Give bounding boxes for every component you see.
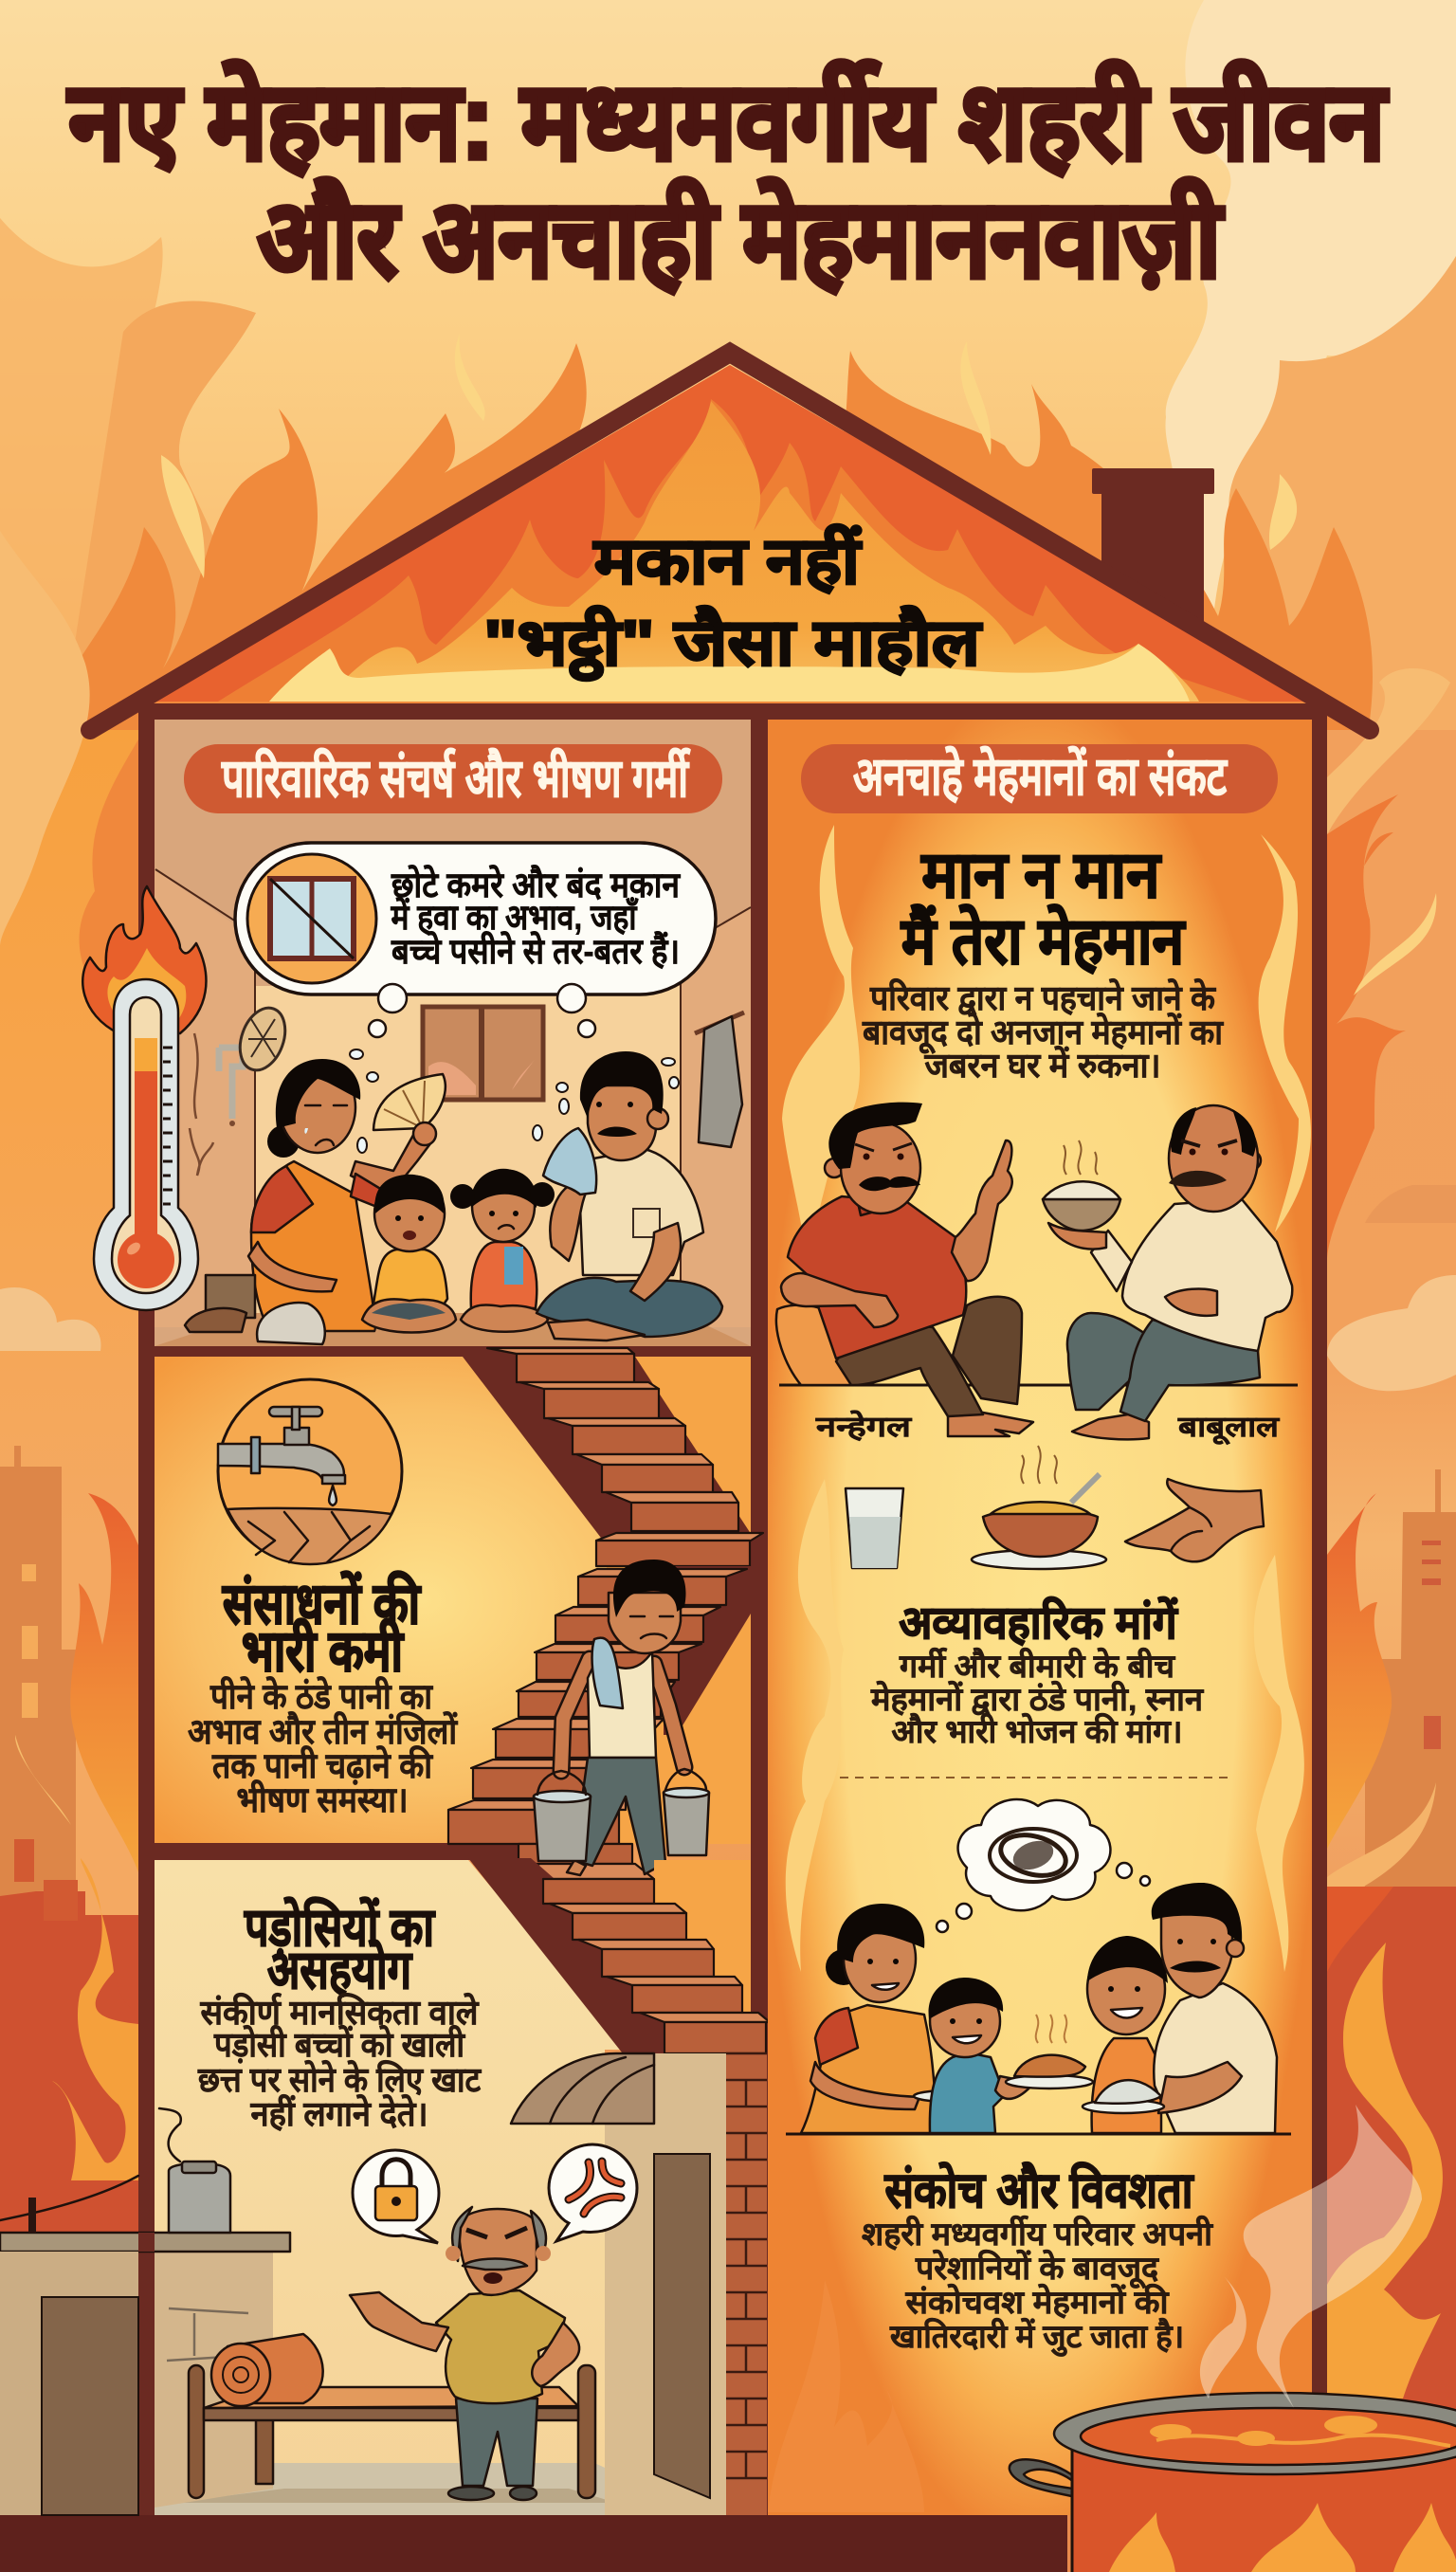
impractical demands text — [870, 1647, 1204, 1750]
title — [67, 60, 1389, 299]
water text: पीने के ठंडे पानी का — [209, 1676, 433, 1716]
neighbours text: संकीर्ण मानसिकता वाले — [200, 1993, 480, 2032]
divider beam — [155, 1346, 751, 1357]
panel: unwanted guests — [768, 720, 1312, 2515]
impractical demands text: गर्मी और बीमारी के बीच — [899, 1647, 1175, 1685]
compulsion text: परेशानियों के बावजूद — [915, 2249, 1159, 2289]
father — [537, 1051, 722, 1341]
neighbours text: छत्त पर सोने के लिए खाट — [197, 2060, 482, 2099]
guests text — [862, 978, 1225, 1085]
roof heading: "भट्ठी" जैसा माहौल — [483, 606, 983, 681]
neighbours heading — [244, 1896, 436, 1999]
impractical demands text: और भारी भोजन की मांग। — [891, 1712, 1183, 1750]
cot and rolled bedding — [189, 2334, 595, 2498]
side flames inside panel — [782, 825, 1311, 1261]
icons: water, food, pointing hand — [846, 1446, 1264, 1569]
plates of food — [1006, 2075, 1093, 2089]
floor line — [779, 1384, 1298, 1386]
name label: बाबूलाल — [1177, 1412, 1281, 1445]
water tank and terrace wall — [0, 2108, 290, 2515]
side flame layers — [0, 730, 138, 1545]
guests heading: मैं तेरा मेहमान — [900, 904, 1186, 977]
stair steps down to terrace — [543, 1879, 770, 2053]
speech bubble: no ventilation — [235, 843, 716, 1037]
room walls — [155, 869, 255, 1327]
hand fan — [373, 1074, 446, 1130]
guests text: जबरन घर में रुकना। — [924, 1046, 1160, 1085]
room window — [423, 1007, 543, 1100]
steam — [1200, 2105, 1422, 2408]
mother serving — [801, 2005, 938, 2133]
neighbours text: नहीं लगाने देते। — [250, 2094, 428, 2133]
panel: family and heat — [82, 720, 751, 1346]
water heading: भारी कमी — [242, 1618, 405, 1683]
hanging towel — [695, 1012, 744, 1147]
thermometer and flame — [82, 886, 206, 1310]
man carrying buckets — [534, 1560, 709, 1875]
name label: नन्हेगल — [815, 1410, 913, 1443]
neighbours heading: असहयोग — [267, 1939, 413, 1999]
angry neighbour — [350, 2207, 579, 2500]
city buildings — [0, 1446, 76, 1896]
compulsion text: संकोचवश मेहमानों की — [904, 2283, 1170, 2321]
impractical demands heading: अव्यावहारिक मांगें — [899, 1596, 1178, 1649]
lock speech bubble — [353, 2150, 439, 2243]
water text: भीषण समस्या। — [237, 1779, 408, 1819]
staircase upper flight — [487, 1348, 763, 1566]
mother — [248, 1059, 446, 1331]
building with door and awning — [511, 2053, 767, 2515]
compulsion text: खातिरदारी में जुट जाता है। — [889, 2317, 1184, 2357]
happy host family — [801, 1883, 1277, 2133]
speech bubble: no ventilation: बच्चे पसीने से तर-बतर हैं। — [391, 931, 680, 971]
water text — [188, 1676, 458, 1819]
guests text: बावजूद दो अनजान मेहमानों का — [862, 1012, 1225, 1054]
boy — [362, 1175, 456, 1333]
boy in blue — [930, 2052, 1005, 2133]
guests heading: मान न मान — [920, 839, 1162, 911]
pill heading: पारिवारिक संचर्ष और भीषण गर्मी — [221, 747, 691, 808]
guests heading — [900, 839, 1186, 977]
roof heading — [483, 524, 983, 681]
roof heading: मकान नहीं — [592, 524, 863, 597]
girl — [450, 1169, 555, 1332]
house walls — [0, 703, 1327, 2572]
guests text: परिवार द्वारा न पहचाने जाने के — [869, 978, 1216, 1017]
impractical demands text: मेहमानों द्वारा ठंडे पानी, स्नान — [870, 1680, 1204, 1718]
title: नए मेहमान: मध्यमवर्गीय शहरी जीवन — [67, 60, 1389, 181]
chimney — [1092, 468, 1214, 636]
sweat drops — [350, 1049, 679, 1153]
father — [1154, 1983, 1277, 2133]
compulsion text: शहरी मध्यवर्गीय परिवार अपनी — [862, 2215, 1213, 2253]
right wall flames — [1327, 1493, 1392, 1849]
anger speech bubble — [549, 2144, 637, 2241]
panel: water shortage — [155, 1348, 763, 1879]
compulsion heading: संकोच और विवशता — [884, 2162, 1195, 2218]
pill heading: अनचाहे मेहमानों का संकट — [853, 745, 1228, 806]
speech bubble: no ventilation: छोटे कमरे और बंद मकान — [391, 865, 681, 904]
compulsion text — [862, 2215, 1213, 2357]
neighbours text: पड़ोसी बच्चों को खाली — [213, 2025, 466, 2064]
neighbours text — [197, 1993, 482, 2133]
water heading: संसाधनों की — [222, 1571, 422, 1635]
neighbours heading: पड़ोसियों का — [244, 1896, 436, 1957]
guest: Babulal — [1043, 1105, 1292, 1439]
water heading — [222, 1571, 422, 1683]
water text: अभाव और तीन मंजिलों — [188, 1711, 458, 1751]
staircase lower flight — [448, 1566, 751, 1879]
buckets — [534, 1797, 591, 1861]
pill heading — [801, 744, 1278, 813]
speech bubble: no ventilation: में हवा का अभाव, जहाँ — [391, 897, 639, 937]
floor line — [786, 2133, 1291, 2135]
water text: तक पानी चढ़ाने की — [211, 1745, 433, 1785]
guest: Nanhegal — [776, 1103, 1033, 1436]
older boy — [1092, 2038, 1161, 2133]
wall fan — [219, 1002, 293, 1126]
water tap icon — [218, 1379, 402, 1564]
household pile — [185, 1275, 325, 1344]
panel: neighbours — [0, 1858, 770, 2515]
title: और अनचाही मेहमाननवाज़ी — [258, 177, 1224, 299]
roof — [90, 353, 1370, 730]
thought cloud — [937, 1799, 1150, 1932]
cooking pot — [1010, 2393, 1456, 2572]
left wall flames — [70, 1493, 138, 1872]
pill heading — [184, 744, 722, 813]
